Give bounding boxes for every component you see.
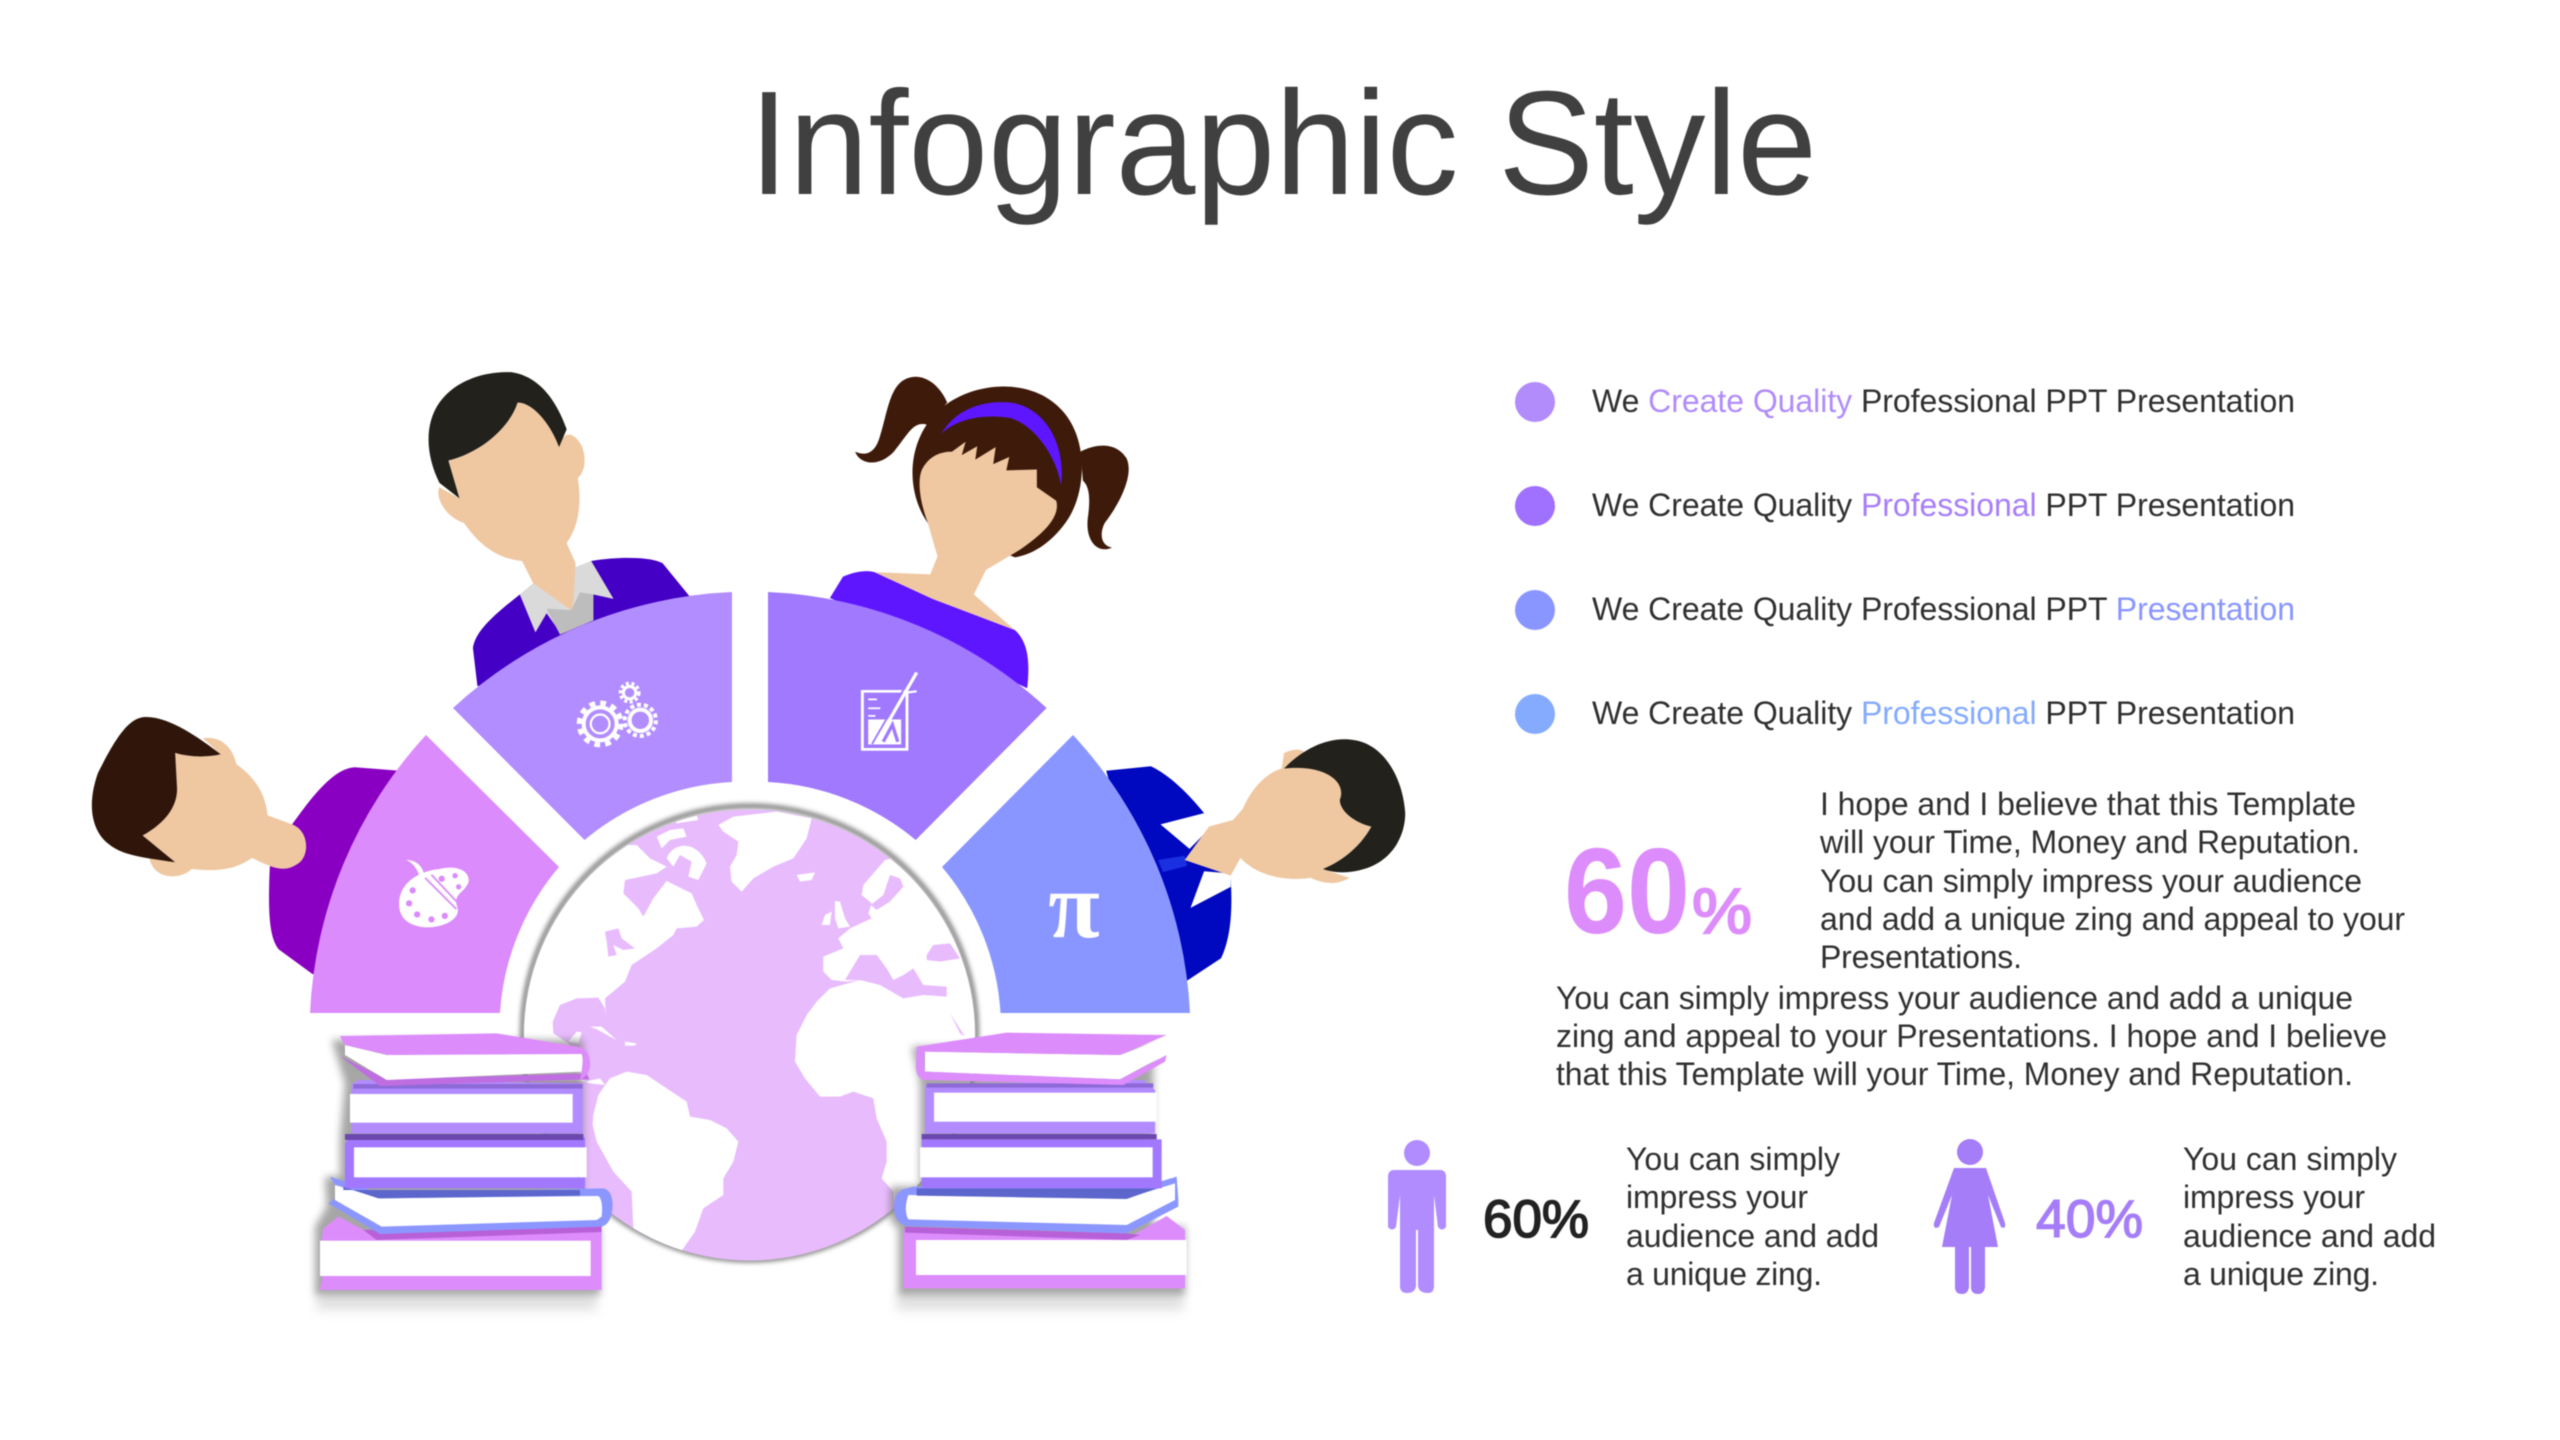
Mediterranean [845,955,947,998]
continent: Greenland [718,812,812,892]
person: girl [830,377,1129,688]
bullet list [1515,382,2295,734]
icon: beaker and pencil [862,673,917,749]
wheel segment: lavender with gears icon [453,592,732,840]
text block: women description: audience and add [2183,1218,2436,1254]
book 4 [328,1177,613,1234]
wheel segment: blue with pi icon [942,735,1190,1013]
text block: women description: impress your [2183,1179,2365,1215]
book 2 right [925,1080,1157,1133]
text block: men description: a unique zing. [1626,1256,1822,1292]
Baltic [871,875,903,910]
big stat: 60%: % [1692,875,1752,947]
book 3 [345,1134,587,1188]
books: left stack [315,1033,613,1310]
text block: paragraph [1556,980,2387,1092]
title: Infographic Style [749,61,1817,226]
continent: South America [593,1072,738,1253]
book 4 right [894,1177,1178,1233]
globe [503,806,1010,1260]
icon: palette [399,860,469,927]
books: right stack [890,1033,1187,1310]
continent: Eurasia [822,858,972,1000]
book 5 [320,1217,602,1290]
book 1 [340,1033,590,1086]
text block: stat description: and add a unique zing and appeal to your [1820,901,2405,937]
book 1 right [916,1033,1167,1085]
bullet 4: We Create Quality Professional PPT Presentation [1592,695,2295,731]
bullet 3: We Create Quality Professional PPT Presentation [1592,591,2295,627]
icon: gears [579,683,656,745]
text block: women description [2183,1141,2436,1292]
person: left man [92,717,399,978]
bullet 2: We Create Quality Professional PPT Presentation [1592,487,2295,523]
Red Sea [950,1015,965,1036]
caribbean islands [568,1027,637,1085]
text block: paragraph: zing and appeal to your Presentations. I hope and I believe [1556,1018,2387,1054]
text block: stat description: You can simply impress your audience [1820,863,2362,899]
island: Iceland [797,872,815,882]
text block: stat description: will your Time, Money and Reputation. [1819,824,2360,860]
book 3 right [920,1134,1162,1188]
continent: North America [503,845,704,1082]
text block: paragraph: that this Template will your Time, Money and Reputation. [1556,1056,2353,1092]
text block: women description: a unique zing. [2183,1256,2379,1292]
wheel segment: purple with beaker icon [768,592,1047,840]
Black Sea [927,943,960,962]
text block: men description: impress your [1626,1179,1808,1215]
continent: Africa [794,980,976,1201]
arctic islands [657,815,707,880]
island: Britain and Ireland [822,901,850,928]
text block: men description [1626,1141,1879,1292]
icon: man [1388,1140,1446,1293]
person: top man [429,372,692,686]
icon: pi: π [1048,854,1100,958]
lakes [605,928,635,957]
bullet 1: We Create Quality Professional PPT Presentation [1592,383,2295,419]
icon: woman [1934,1139,2005,1294]
stat: 60 percent: 60% [1483,1190,1589,1249]
text block: stat description: Presentations. [1820,939,2022,975]
text block: men description: audience and add [1626,1218,1879,1254]
Italy [902,975,903,976]
text block: stat description [1819,786,2405,975]
stat: 40 percent: 40% [2036,1190,2143,1249]
big stat: 60%: 60 [1564,823,1690,959]
text block: women description: You can simply [2183,1141,2397,1177]
book 2 [350,1080,583,1133]
person: right man [1106,739,1405,981]
book 5 right [903,1216,1187,1288]
text block: men description: You can simply [1626,1141,1840,1177]
illustration: people, wheel, globe and books [92,372,1405,1310]
text block: stat description: I hope and I believe that this Template [1820,786,2356,822]
wheel segment: pink with palette icon [310,735,559,1013]
text block: paragraph: You can simply impress your audience and add a unique [1556,980,2353,1016]
